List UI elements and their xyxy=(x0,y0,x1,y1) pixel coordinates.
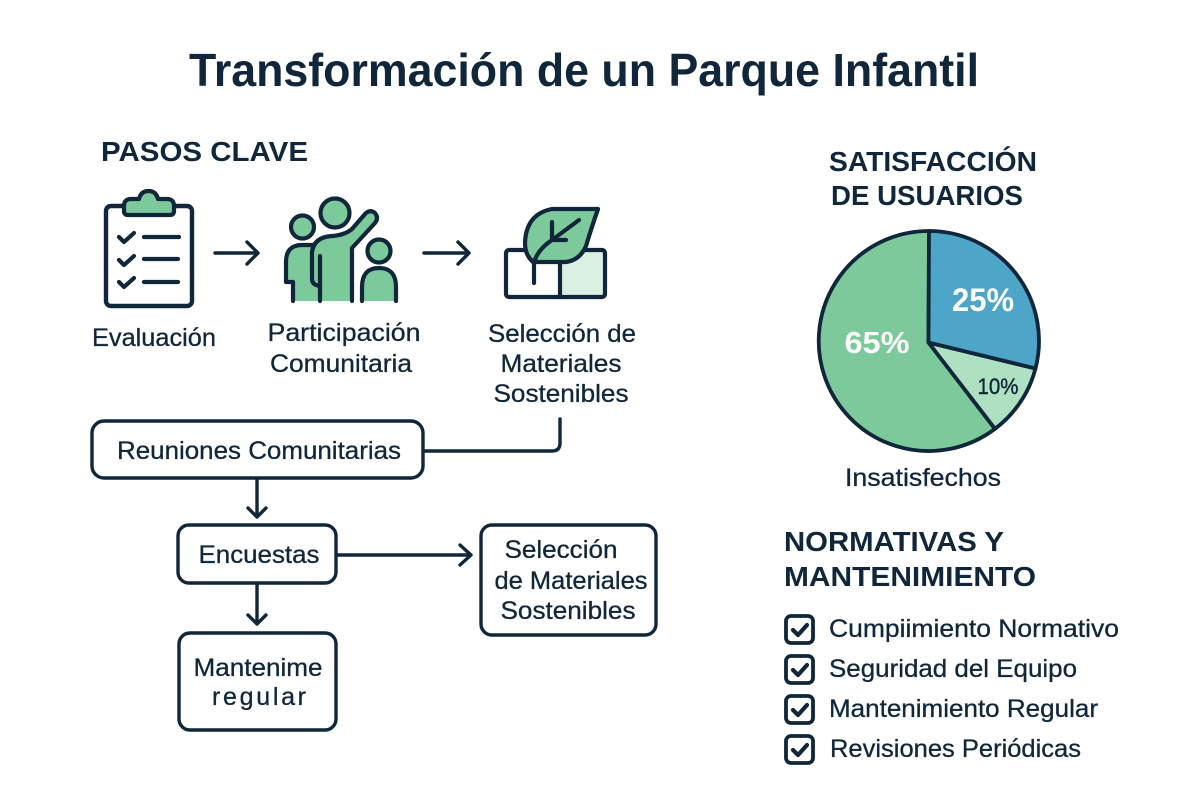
box: mantenimiento regular: Mantenime xyxy=(194,654,322,682)
icon: clipboard xyxy=(106,191,192,306)
box: encuestas: Encuestas xyxy=(198,541,320,569)
heading: satisfacción de usuarios: DE USUARIOS xyxy=(831,180,1023,211)
connector: selección to reuniones xyxy=(424,419,560,451)
slice: 10% xyxy=(928,342,1036,429)
label: participación comunitaria xyxy=(268,319,420,378)
label: selección de materiales sostenibles: Sostenibles xyxy=(494,380,628,408)
heading: satisfacción de usuarios xyxy=(829,146,1037,211)
label: participación comunitaria: Participación xyxy=(268,319,420,347)
box: selección de materiales sostenibles: Selección xyxy=(504,536,618,564)
checklist xyxy=(786,615,1119,763)
box: reuniones comunitarias: Reuniones Comunitarias xyxy=(117,437,401,465)
label: selección de materiales sostenibles: Selección de xyxy=(488,320,636,348)
heading: satisfacción de usuarios: SATISFACCIÓN xyxy=(829,146,1037,177)
box: selección de materiales sostenibles: de Materiales xyxy=(494,567,648,595)
heading: normativas y mantenimiento xyxy=(784,526,1036,592)
arrow: encuestas to selección xyxy=(337,545,471,565)
box: reuniones comunitarias xyxy=(92,421,423,478)
arrow: participación to selección xyxy=(424,242,469,264)
label: selección de materiales sostenibles xyxy=(488,320,636,408)
item: mantenimiento regular: Mantenimiento Regular xyxy=(829,695,1098,723)
heading: normativas y mantenimiento: NORMATIVAS Y xyxy=(784,526,1004,557)
pie chart: satisfaction xyxy=(819,231,1039,451)
label: selección de materiales sostenibles: Materiales xyxy=(500,350,622,378)
arrow: encuestas to mantenimiento xyxy=(248,584,266,624)
slice: 25% xyxy=(928,231,1039,368)
icon: leaf and material blocks xyxy=(506,209,605,297)
item: seguridad del equipo: Seguridad del Equipo xyxy=(829,655,1077,683)
value: 65%: 65% xyxy=(844,325,910,360)
value: 10%: 10% xyxy=(978,374,1018,399)
icon: community group xyxy=(286,198,396,301)
arrow: reuniones to encuestas xyxy=(248,479,266,517)
title: Transformación de un Parque Infantil xyxy=(189,44,979,96)
box: mantenimiento regular xyxy=(179,633,336,730)
item: revisiones periódicas: Revisiones Periódicas xyxy=(830,735,1081,763)
label: evaluación: Evaluación xyxy=(92,324,216,352)
box: mantenimiento regular: regular xyxy=(212,683,306,711)
heading: pasos clave: PASOS CLAVE xyxy=(101,136,308,167)
item: cumplimiento normativo: Cumpiimiento Normativo xyxy=(829,615,1119,643)
heading: normativas y mantenimiento: MANTENIMIENTO xyxy=(784,561,1036,592)
slice: 65% xyxy=(819,231,995,451)
box: selección de materiales sostenibles: Sostenibles xyxy=(500,597,636,625)
arrow: evaluación to participación xyxy=(215,242,258,264)
box: selección de materiales sostenibles xyxy=(481,525,656,635)
box: encuestas xyxy=(178,525,336,583)
label: participación comunitaria: Comunitaria xyxy=(270,350,412,378)
value: 25%: 25% xyxy=(952,282,1014,318)
label: insatisfechos: Insatisfechos xyxy=(845,464,1001,492)
